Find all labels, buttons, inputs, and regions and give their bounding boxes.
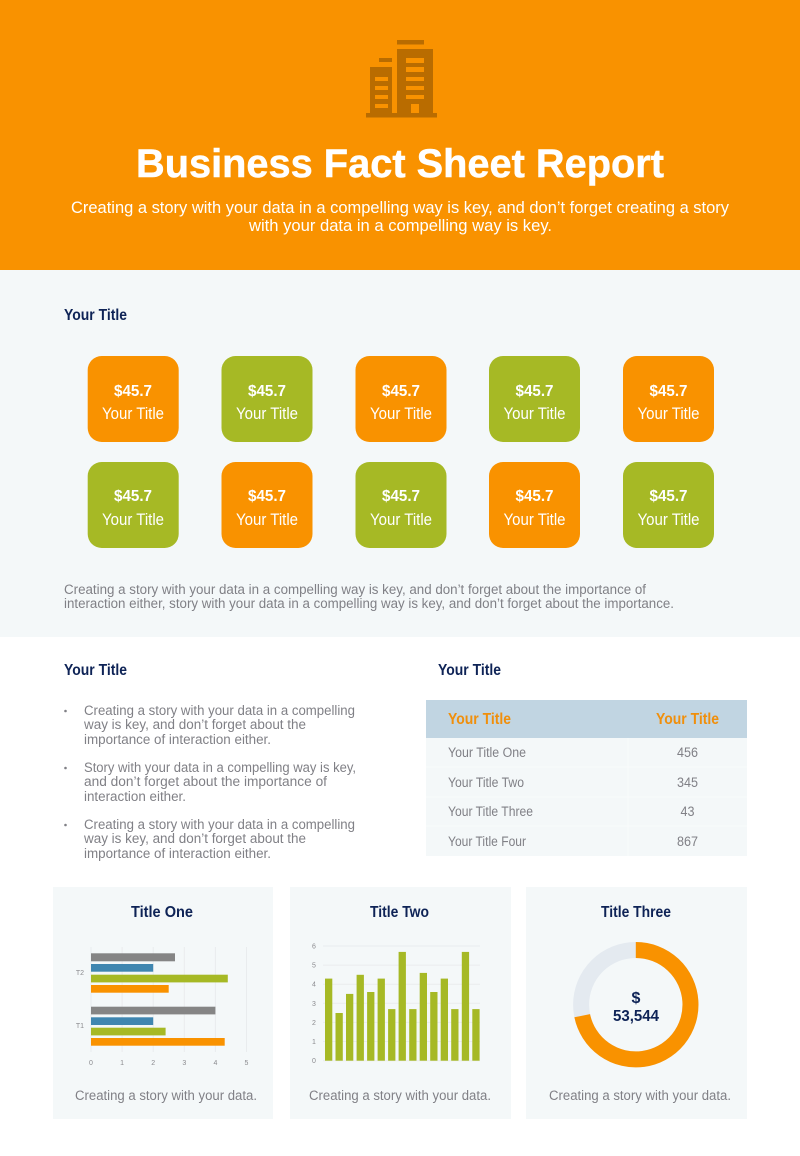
description paragraph: interaction either, story with your data in a compelling way is key, and don’t forget about the importance. — [64, 596, 674, 611]
table: Your Title Two — [448, 775, 524, 790]
bullet list — [64, 703, 356, 861]
tile 10: $45.7 — [650, 488, 688, 505]
table: 345 — [677, 775, 698, 790]
table: 456 — [677, 745, 698, 760]
column chart: 0 — [312, 1058, 316, 1065]
column chart: 4 — [312, 982, 316, 989]
table: Your Title — [656, 711, 719, 728]
table: Your Title Three — [448, 804, 533, 819]
header banner — [0, 0, 800, 270]
bar chart — [76, 947, 249, 1067]
tile 6: $45.7 — [114, 488, 152, 505]
tile 5 — [623, 356, 714, 442]
tile 2 — [222, 356, 312, 442]
bullet list: interaction either. — [84, 789, 186, 804]
subtitle — [71, 199, 730, 235]
bar chart: T2 — [76, 970, 84, 977]
tile 4 — [489, 356, 580, 442]
table — [426, 700, 747, 856]
tile 10 — [623, 462, 714, 548]
tile 3: Your Title — [370, 405, 432, 423]
tile 5: Your Title — [638, 405, 700, 423]
card title one: Title One — [131, 904, 193, 921]
bullet list: importance of interaction either. — [84, 846, 271, 861]
tile 3 — [356, 356, 446, 442]
caption three: Creating a story with your data. — [549, 1088, 731, 1103]
tile 1: Your Title — [102, 405, 164, 423]
tile 1 — [88, 356, 179, 442]
bullet list: way is key, and don’t forget about the — [83, 717, 306, 732]
tile 9: $45.7 — [516, 488, 554, 505]
table: 43 — [680, 804, 694, 819]
bar chart: 2 — [151, 1060, 155, 1067]
tile 10: Your Title — [638, 511, 700, 529]
tile 7: $45.7 — [248, 488, 286, 505]
tile 7: Your Title — [236, 511, 298, 529]
table: Your Title — [448, 711, 511, 728]
tile 8: $45.7 — [382, 488, 420, 505]
tile 9 — [489, 462, 580, 548]
tile 7 — [222, 462, 312, 548]
bullet list: importance of interaction either. — [84, 732, 271, 747]
tile 1: $45.7 — [114, 383, 152, 400]
subtitle: with your data in a compelling way is key. — [248, 217, 552, 235]
heading: table: Your Title — [438, 662, 501, 679]
tile 4: Your Title — [504, 405, 566, 423]
panel: title one horizontal bar chart — [53, 887, 273, 1119]
bar chart: T1 — [76, 1023, 84, 1030]
heading: key figures: Your Title — [64, 307, 127, 324]
donut chart: $ — [632, 990, 641, 1007]
tile 6: Your Title — [102, 511, 164, 529]
tile 8 — [356, 462, 446, 548]
bar chart: 4 — [213, 1060, 217, 1067]
tile 6 — [88, 462, 179, 548]
card title three: Title Three — [601, 904, 671, 921]
bullet list: Story with your data in a compelling way is key, — [84, 760, 356, 775]
table: 867 — [677, 834, 698, 849]
description paragraph: Creating a story with your data in a compelling way is key, and don’t forget about the importance of — [64, 582, 646, 597]
title: Business Fact Sheet Report — [136, 142, 664, 186]
donut chart: 53,544 — [613, 1008, 659, 1025]
table: Your Title Four — [448, 834, 526, 849]
tile 2: $45.7 — [248, 383, 286, 400]
tile 5: $45.7 — [650, 383, 688, 400]
bar chart: 3 — [182, 1060, 186, 1067]
panel: key figures — [0, 270, 800, 637]
panel: title two column chart — [290, 887, 511, 1119]
bullet list: Creating a story with your data in a compelling — [84, 817, 355, 832]
donut chart — [581, 950, 690, 1059]
bullet list: way is key, and don’t forget about the — [83, 831, 306, 846]
column chart: 1 — [312, 1039, 316, 1046]
column chart: 6 — [312, 944, 316, 950]
icon: office buildings — [366, 40, 437, 118]
tile 4: $45.7 — [516, 383, 554, 400]
column chart — [312, 944, 480, 1065]
caption one: Creating a story with your data. — [75, 1088, 257, 1103]
tile 2: Your Title — [236, 405, 298, 423]
bar chart: 0 — [89, 1060, 93, 1067]
subtitle: Creating a story with your data in a compelling way is key, and don’t forget creating a story — [71, 199, 730, 217]
column chart: 5 — [312, 962, 316, 970]
heading: bullet list: Your Title — [64, 662, 127, 679]
bullet list: and don’t forget about the importance of — [84, 774, 327, 789]
bar chart: 1 — [120, 1060, 124, 1067]
column chart: 2 — [312, 1020, 316, 1027]
tile 3: $45.7 — [382, 383, 420, 400]
column chart: 3 — [312, 1001, 316, 1008]
caption two: Creating a story with your data. — [309, 1088, 491, 1103]
tile 8: Your Title — [370, 511, 432, 529]
tile 9: Your Title — [504, 511, 566, 529]
table: Your Title One — [448, 745, 526, 760]
bar chart: 5 — [245, 1060, 249, 1067]
bullet list: Creating a story with your data in a compelling — [84, 703, 355, 718]
panel: title three donut chart — [526, 887, 747, 1119]
description paragraph — [64, 582, 674, 611]
card title two: Title Two — [370, 904, 429, 921]
